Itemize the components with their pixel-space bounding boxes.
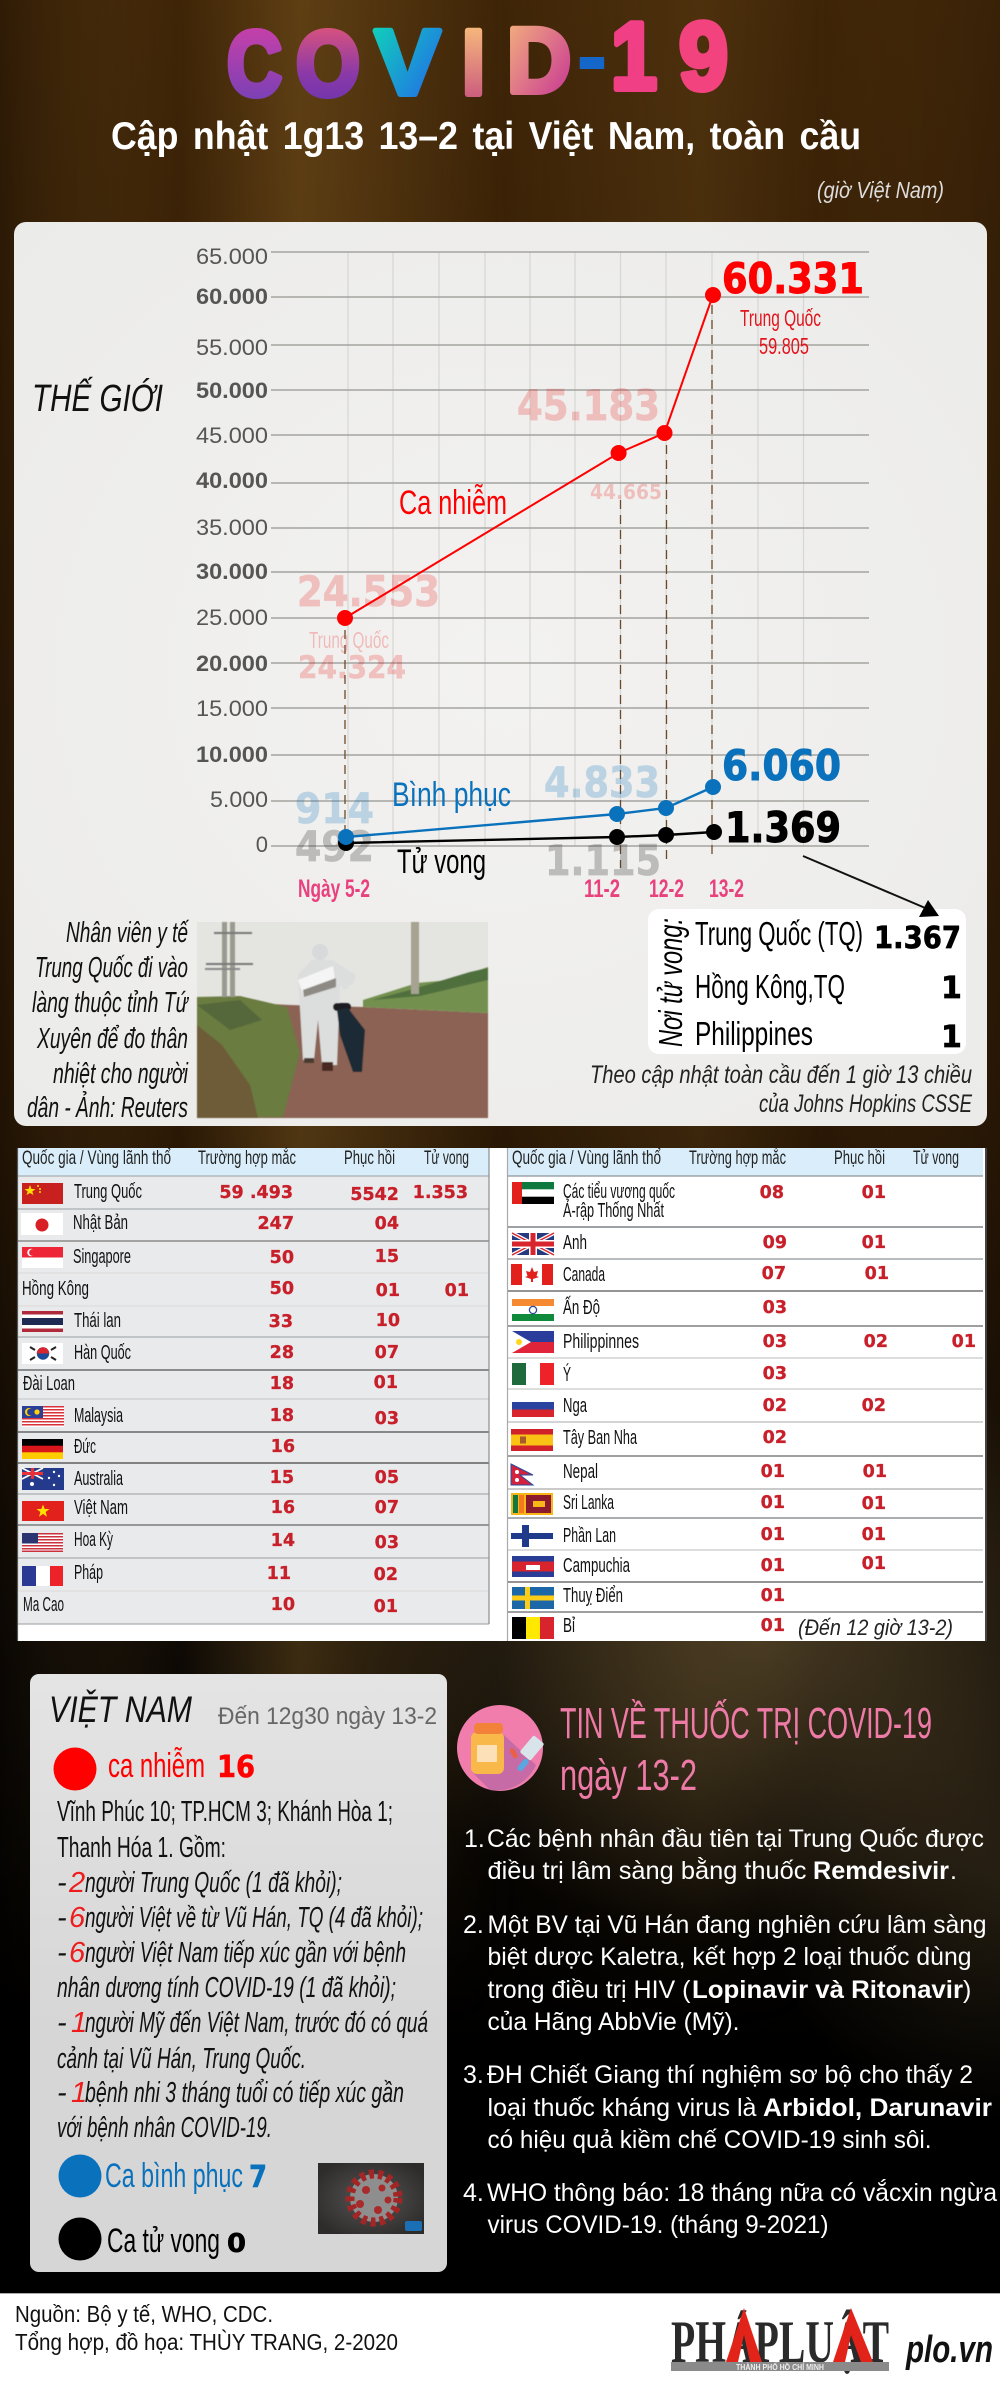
photo caption: nhiệt cho người <box>53 1058 189 1090</box>
line: recovered <box>338 779 721 845</box>
values: left table: 50 <box>270 1279 294 1299</box>
rows: right table: Campuchia <box>563 1555 631 1577</box>
stat: infected: ca nhiễm <box>108 1747 205 1785</box>
photo caption <box>27 917 190 1124</box>
title: COVID-19: - <box>576 0 608 111</box>
note: data time: (Đến 12 giờ 13-2) <box>798 1615 953 1640</box>
text: case breakdown <box>57 1796 428 2144</box>
chart: y axis labels: 45.000 <box>196 423 268 448</box>
x axis dates: 12-2 <box>649 875 684 903</box>
stat: deaths: Ca tử vong <box>107 2222 220 2260</box>
values: right table: 02 <box>862 1396 886 1416</box>
values: right table: 03 <box>763 1298 787 1318</box>
photo: medical worker with bicycle <box>197 922 488 1118</box>
header: left table: Trường hợp mắc <box>198 1146 296 1169</box>
item 3: loại thuốc kháng virus là <box>488 2094 757 2122</box>
rows: left table: Malaysia <box>74 1405 124 1427</box>
values: right table: 01 <box>862 1554 886 1574</box>
text: case breakdown: 6 <box>69 1937 86 1969</box>
values: left table: 01 <box>374 1373 398 1393</box>
death row: Philippines: 1 <box>941 1020 962 1055</box>
chart: y axis labels: 5.000 <box>210 787 268 812</box>
heading: world: THẾ GIỚI <box>32 376 163 420</box>
header: left table <box>22 1146 469 1169</box>
values: right table: 01 <box>761 1556 785 1576</box>
rows: left table <box>22 1181 142 1616</box>
chart: faded earlier values: 24.553 <box>297 567 440 616</box>
rows: right table: Philippinnes <box>563 1331 639 1353</box>
title: COVID-19: D <box>507 10 571 112</box>
rows: right table: Các tiểu vương quốc <box>563 1181 675 1203</box>
item 2: 2. <box>463 1911 484 1939</box>
rows: left table: Australia <box>74 1468 124 1490</box>
values: right table: 01 <box>761 1586 785 1606</box>
value: deaths total: 1.369 <box>725 803 841 852</box>
logo: Pháp Luật: PHÁPLUẬT <box>671 2309 889 2375</box>
item 2: Một BV tại Vũ Hán đang nghiên cứu lâm sàng <box>488 1911 986 1939</box>
date note: Đến 12g30 ngày 13-2 <box>218 1703 437 1730</box>
panel: country tables <box>17 1146 987 1641</box>
x axis dates: 13-2 <box>709 875 744 903</box>
item 2: biệt dược Kaletra, kết hợp 2 loại thuốc dùng <box>488 1943 972 1971</box>
chart: y axis labels: 50.000 <box>196 378 268 403</box>
rows: right table: Phần Lan <box>563 1525 616 1547</box>
chart: y axis labels: 25.000 <box>196 605 268 630</box>
item 1: 1. <box>464 1825 485 1853</box>
x axis dates: 11-2 <box>584 875 620 903</box>
photo caption: Trung Quốc đi vào <box>35 952 188 984</box>
values: left table: 59 .493 <box>219 1183 293 1203</box>
stat: deaths: 0 <box>227 2229 246 2259</box>
values: left table: 03 <box>375 1409 399 1429</box>
text: case breakdown: bệnh nhi 3 tháng tuổi có tiếp xúc gần <box>85 2077 404 2109</box>
stat: infected <box>54 1747 255 1790</box>
label: infected: Ca nhiễm <box>399 484 507 522</box>
values: right table: 01 <box>761 1525 785 1545</box>
stat: recovered: Ca bình phục <box>105 2157 243 2195</box>
rows: right table: Tây Ban Nha <box>563 1427 638 1449</box>
rows: right table <box>563 1181 675 1637</box>
photo caption: Nhân viên y tế <box>66 917 189 949</box>
text: case breakdown: Thanh Hóa 1. Gồm: <box>57 1832 226 1864</box>
values: left table: 18 <box>270 1374 294 1394</box>
text: case breakdown: người Mỹ đến Việt Nam, trước đó có quá <box>85 2007 428 2039</box>
values: left table: 07 <box>375 1498 399 1518</box>
header: right table: Quốc gia / Vùng lãnh thổ <box>512 1147 661 1169</box>
values: left table: 03 <box>375 1533 399 1553</box>
values: left table <box>219 1183 469 1617</box>
values: right table: 02 <box>763 1396 787 1416</box>
x axis dates: Ngày 5-2 <box>298 875 370 903</box>
rows: left table: Ma Cao <box>23 1594 64 1616</box>
chart: faded earlier values: 914 <box>295 784 374 833</box>
values: right table: 01 <box>863 1462 887 1482</box>
title: COVID-19: C <box>227 13 282 115</box>
flags: left table <box>21 1183 64 1586</box>
item 3: Arbidol, Darunavir <box>763 2094 992 2122</box>
item 3: có hiệu quả kiềm chế COVID-19 sinh sôi. <box>488 2126 932 2154</box>
title: COVID-19: I <box>462 12 485 114</box>
values: left table: 247 <box>257 1214 294 1234</box>
values: right table: 01 <box>761 1493 785 1513</box>
table: right <box>507 1146 983 1641</box>
item 4: virus COVID-19. (tháng 9-2021) <box>488 2211 828 2239</box>
rows: right table: Nga <box>563 1395 588 1417</box>
chart: y axis labels: 15.000 <box>196 696 268 721</box>
line: infected <box>337 287 721 626</box>
sources <box>15 2301 398 2355</box>
values: left table: 1.353 <box>413 1183 468 1203</box>
values: left table: 14 <box>271 1531 295 1551</box>
rows: left table: Pháp <box>74 1562 103 1584</box>
value: infected total: 60.331 <box>722 254 864 303</box>
stat: recovered <box>58 2154 267 2198</box>
title: COVID-19 <box>227 0 728 115</box>
panel: Vietnam <box>30 1674 447 2272</box>
item 1: Các bệnh nhân đầu tiên tại Trung Quốc được <box>487 1825 984 1853</box>
value: recovered total: 6.060 <box>722 741 841 790</box>
source note <box>590 1061 972 1118</box>
rows: left table: Việt Nam <box>74 1497 128 1519</box>
stat: recovered: 7 <box>249 2160 267 2195</box>
values: left table: 07 <box>375 1343 399 1363</box>
section: drug news <box>457 1697 997 2239</box>
rows: left table: Singapore <box>73 1246 131 1268</box>
values: right table: 01 <box>761 1462 785 1482</box>
stat: deaths <box>58 2218 246 2260</box>
rows: left table: Trung Quốc <box>74 1181 142 1203</box>
values: left table: 10 <box>376 1311 400 1331</box>
chart: faded earlier values <box>295 381 662 885</box>
text: case breakdown: người Việt Nam tiếp xúc gần với bệnh <box>85 1937 406 1969</box>
values: left table: 10 <box>271 1595 295 1615</box>
text: case breakdown: người Trung Quốc (1 đã khỏi); <box>85 1867 342 1899</box>
box: deaths by location <box>648 909 966 1055</box>
panel: world <box>14 222 987 1126</box>
footer band <box>0 2293 1000 2387</box>
values: left table: 11 <box>267 1564 291 1584</box>
item 4: 4. <box>463 2179 484 2207</box>
chart: faded earlier values: 492 <box>295 822 374 871</box>
label: deaths: Tử vong <box>397 843 486 881</box>
x axis dates <box>298 875 744 903</box>
header: right table <box>512 1146 959 1169</box>
values: left table: 33 <box>269 1312 293 1332</box>
text: case breakdown: người Việt về từ Vũ Hán, TQ (4 đã khỏi); <box>85 1902 423 1934</box>
title: COVID-19: 9 <box>679 3 728 110</box>
table: left <box>18 1146 489 1641</box>
logo: Pháp Luật: THÀNH PHỐ HỒ CHÍ MINH <box>736 2362 824 2372</box>
values: left table: 02 <box>374 1565 398 1585</box>
values: right table: 01 <box>862 1183 886 1203</box>
values: right table: 02 <box>864 1332 888 1352</box>
values: left table: 01 <box>445 1281 469 1301</box>
text: case breakdown: với bệnh nhân COVID-19. <box>57 2112 272 2144</box>
logo: Pháp Luật <box>671 2308 889 2375</box>
values: right table: 02 <box>763 1428 787 1448</box>
death row: China: 1.367 <box>874 921 961 956</box>
time note: (giờ Việt Nam) <box>817 177 944 203</box>
chart: y axis labels: 35.000 <box>196 515 268 540</box>
item 2 <box>463 1911 986 2036</box>
values: left table: 01 <box>374 1597 398 1617</box>
rows: right table: Thuỵ Điển <box>563 1585 623 1607</box>
title: COVID-19: V <box>375 12 440 114</box>
heading: drug news: ngày 13-2 <box>560 1751 697 1800</box>
values: left table: 16 <box>271 1498 295 1518</box>
subtitle: Cập nhật 1g13 13–2 tại Việt Nam, toàn cầu <box>111 115 861 158</box>
item 1: . <box>950 1857 957 1885</box>
photo caption: dân - Ảnh: Reuters <box>27 1090 188 1124</box>
title: COVID-19: O <box>296 13 360 115</box>
text: case breakdown: - <box>57 1902 67 1934</box>
death row: Philippines: Philippines <box>695 1015 813 1052</box>
values: right table: 01 <box>952 1332 976 1352</box>
chart: y axis labels <box>196 244 268 857</box>
chart: y axis labels: 30.000 <box>196 559 268 584</box>
rows: right table: Sri Lanka <box>563 1492 615 1514</box>
stat: infected: 16 <box>217 1750 255 1785</box>
values: left table: 01 <box>376 1281 400 1301</box>
values: left table: 50 <box>270 1248 294 1268</box>
text: case breakdown: - <box>57 1867 67 1899</box>
text: case breakdown: - <box>57 1937 67 1969</box>
text: case breakdown: nhân dương tính COVID-19 (1 đã khỏi); <box>57 1972 396 2004</box>
values: left table: 18 <box>270 1406 294 1426</box>
values: left table: 15 <box>375 1247 399 1267</box>
label: recovered: Bình phục <box>392 776 511 814</box>
item 2: trong điều trị HIV ( <box>488 1976 691 2004</box>
rows: right table: Ả-rập Thống Nhất <box>563 1199 664 1222</box>
item 3: ĐH Chiết Giang thí nghiệm sơ bộ cho thấy 2 <box>487 2061 973 2089</box>
rows: left table: Đức <box>74 1436 96 1458</box>
values: right table: 03 <box>763 1364 787 1384</box>
text: case breakdown: 6 <box>69 1902 86 1934</box>
item 4: WHO thông báo: 18 tháng nữa có vắcxin ngừa <box>487 2178 997 2207</box>
values: right table: 08 <box>760 1183 784 1203</box>
values: right table: 07 <box>762 1264 786 1284</box>
values: right table: 01 <box>862 1494 886 1514</box>
header: left table: Phục hồi <box>344 1147 395 1169</box>
rows: left table: Nhật Bản <box>73 1212 128 1234</box>
values: left table: 28 <box>270 1343 294 1363</box>
label: Trung Quốc faded: Trung Quốc <box>309 627 389 653</box>
header: right table: Tử vong <box>913 1147 959 1169</box>
values: left table: 5542 <box>350 1185 399 1205</box>
chart: y axis labels: 60.000 <box>196 284 268 309</box>
sources: Tổng hợp, đồ họa: THÙY TRANG, 2-2020 <box>15 2329 398 2355</box>
chart: y axis labels: 0 <box>256 832 268 857</box>
item 3: 3. <box>463 2061 484 2089</box>
icon: medicine bottle and pills <box>457 1705 544 1791</box>
header: left table: Quốc gia / Vùng lãnh thổ <box>22 1147 171 1169</box>
sources: Nguồn: Bộ y tế, WHO, CDC. <box>15 2301 273 2327</box>
chart: y axis labels: 20.000 <box>196 651 268 676</box>
rows: left table: Hàn Quốc <box>74 1342 131 1364</box>
text: case breakdown: 2 <box>68 1867 85 1899</box>
value: China infected: Trung Quốc <box>740 305 821 331</box>
photo caption: làng thuộc tỉnh Tứ <box>32 987 190 1019</box>
values: left table: 04 <box>375 1214 399 1234</box>
chart: faded earlier values: 45.183 <box>517 381 660 430</box>
value: China infected <box>740 305 821 359</box>
chart: faded earlier values: 1.115 <box>545 836 661 885</box>
chart: y axis labels: 10.000 <box>196 742 268 767</box>
chart: faded earlier values: 4.833 <box>544 758 660 807</box>
death row: Hong Kong: Hồng Kông,TQ <box>695 968 845 1005</box>
rows: right table: Ấn Độ <box>563 1296 600 1319</box>
death row: China: Trung Quốc (TQ) <box>695 915 863 952</box>
chart: y axis labels: 40.000 <box>196 468 268 493</box>
text: case breakdown: Vĩnh Phúc 10; TP.HCM 3; Khánh Hòa 1; <box>57 1796 393 1828</box>
chart: y axis labels: 55.000 <box>196 335 268 360</box>
rows: right table: Ý <box>563 1363 571 1386</box>
values: right table: 03 <box>763 1332 787 1352</box>
text: case breakdown: cảnh tại Vũ Hán, Trung Quốc. <box>57 2043 306 2075</box>
value: China infected: 59.805 <box>759 333 809 359</box>
text: case breakdown: - <box>57 2007 67 2039</box>
rows: right table: Nepal <box>563 1461 598 1483</box>
rows: left table: Hồng Kông <box>22 1278 89 1300</box>
text: case breakdown: - <box>57 2077 67 2109</box>
values: right table: 09 <box>763 1233 787 1253</box>
rows: right table: Canada <box>563 1264 606 1286</box>
rows: left table: Hoa Kỳ <box>74 1529 113 1551</box>
chart: faded earlier values: 24.324 <box>298 650 406 686</box>
rows: left table: Thái lan <box>74 1310 121 1332</box>
item 2: Lopinavir và Ritonavir <box>692 1976 963 2004</box>
photo caption: Xuyên để đo thân <box>36 1023 188 1055</box>
values: right table: 01 <box>862 1525 886 1545</box>
values: left table: 15 <box>270 1468 294 1488</box>
header: left table: Tử vong <box>424 1147 469 1169</box>
text: case breakdown: 1 <box>71 2077 87 2109</box>
death row: Philippines <box>695 1015 962 1055</box>
header: right table: Trường hợp mắc <box>689 1146 786 1169</box>
header: right table: Phục hồi <box>834 1147 885 1169</box>
rows: left table: Đài Loan <box>23 1373 75 1395</box>
chart: grid <box>271 252 869 868</box>
rows: right table: Anh <box>563 1232 587 1254</box>
flags: right table <box>511 1182 554 1639</box>
chart: faded earlier values: 44.665 <box>590 480 662 504</box>
values: left table: 05 <box>375 1468 399 1488</box>
text: case breakdown: 1 <box>71 2007 87 2039</box>
image: coronavirus <box>318 2163 424 2234</box>
line: deaths <box>338 824 722 851</box>
item 2: ) <box>963 1976 971 2004</box>
values: right table: 01 <box>865 1264 889 1284</box>
item 1: Remdesivir <box>813 1857 949 1885</box>
values: right table: 01 <box>862 1233 886 1253</box>
rows: right table: Bỉ <box>563 1615 575 1637</box>
values: right table: 01 <box>761 1616 785 1636</box>
item 2: của Hãng AbbVie (Mỹ). <box>488 2008 740 2036</box>
item 4 <box>463 2178 997 2239</box>
title: COVID-19: 1 <box>611 3 657 110</box>
item 1: điều trị lâm sàng bằng thuốc <box>488 1856 806 1885</box>
values: left table: 16 <box>271 1437 295 1457</box>
item 1 <box>464 1825 984 1885</box>
values: right table <box>760 1183 976 1636</box>
heading: Vietnam: VIỆT NAM <box>49 1689 192 1730</box>
item 3 <box>463 2061 992 2154</box>
arrow <box>803 856 939 917</box>
heading: drug news <box>560 1697 932 1800</box>
death row: Hong Kong: 1 <box>941 971 962 1006</box>
heading: deaths by place: Nơi tử vong: <box>652 918 689 1047</box>
chart: y axis labels: 65.000 <box>196 244 268 269</box>
